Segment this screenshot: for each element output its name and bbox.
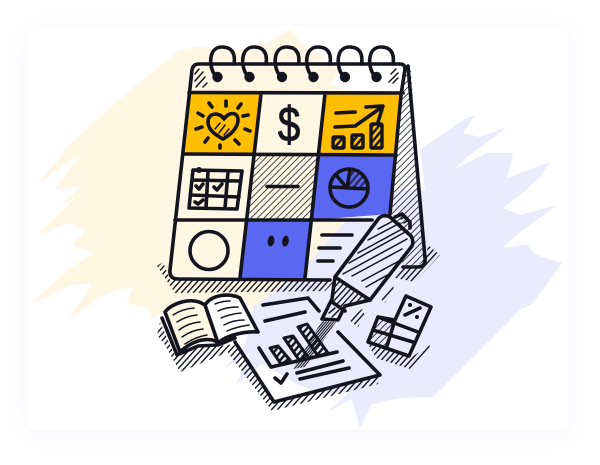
open book bbox=[162, 295, 258, 355]
icon: heart with rays bbox=[196, 101, 250, 148]
text lines cell bbox=[318, 235, 352, 261]
shadow hatching bbox=[157, 245, 440, 411]
percent sign bbox=[405, 303, 420, 319]
icon: pie chart bbox=[330, 169, 368, 207]
book page lines bbox=[173, 301, 249, 344]
marker outline bbox=[335, 216, 413, 300]
icon: growth arrow and bars bbox=[333, 106, 383, 148]
yellow cell: growth chart bbox=[319, 94, 401, 153]
brush stroke: lavender bbox=[225, 115, 562, 428]
spiral rings bbox=[211, 47, 393, 82]
yellow cell: heart bbox=[185, 94, 261, 153]
marker pen bbox=[322, 214, 413, 320]
circle icon bbox=[190, 232, 228, 270]
calendar outline and grid bbox=[170, 64, 405, 280]
hatched cell with dash bbox=[247, 156, 317, 219]
calendar stand back bbox=[388, 65, 425, 267]
check mark bbox=[275, 374, 287, 383]
mini calendar icon bbox=[189, 167, 242, 209]
document text lines bbox=[297, 361, 349, 379]
header corner hatching bbox=[195, 69, 398, 87]
marker tip bbox=[332, 279, 369, 308]
calculator bbox=[368, 296, 431, 356]
bar chart bbox=[259, 324, 337, 367]
blue cell: pie chart bbox=[312, 155, 395, 220]
dollar cell icon: $ bbox=[278, 97, 300, 152]
blue cell: two dots bbox=[240, 220, 311, 278]
brush stroke: cream bbox=[30, 29, 350, 325]
document outline bbox=[235, 332, 380, 402]
highlighter streak bbox=[293, 321, 336, 369]
document with bar chart bbox=[235, 298, 380, 402]
document heading lines bbox=[263, 298, 319, 321]
marker body hatching bbox=[343, 221, 407, 287]
calendar bbox=[170, 47, 425, 280]
card background bbox=[28, 26, 568, 430]
marker cap bbox=[395, 214, 410, 228]
